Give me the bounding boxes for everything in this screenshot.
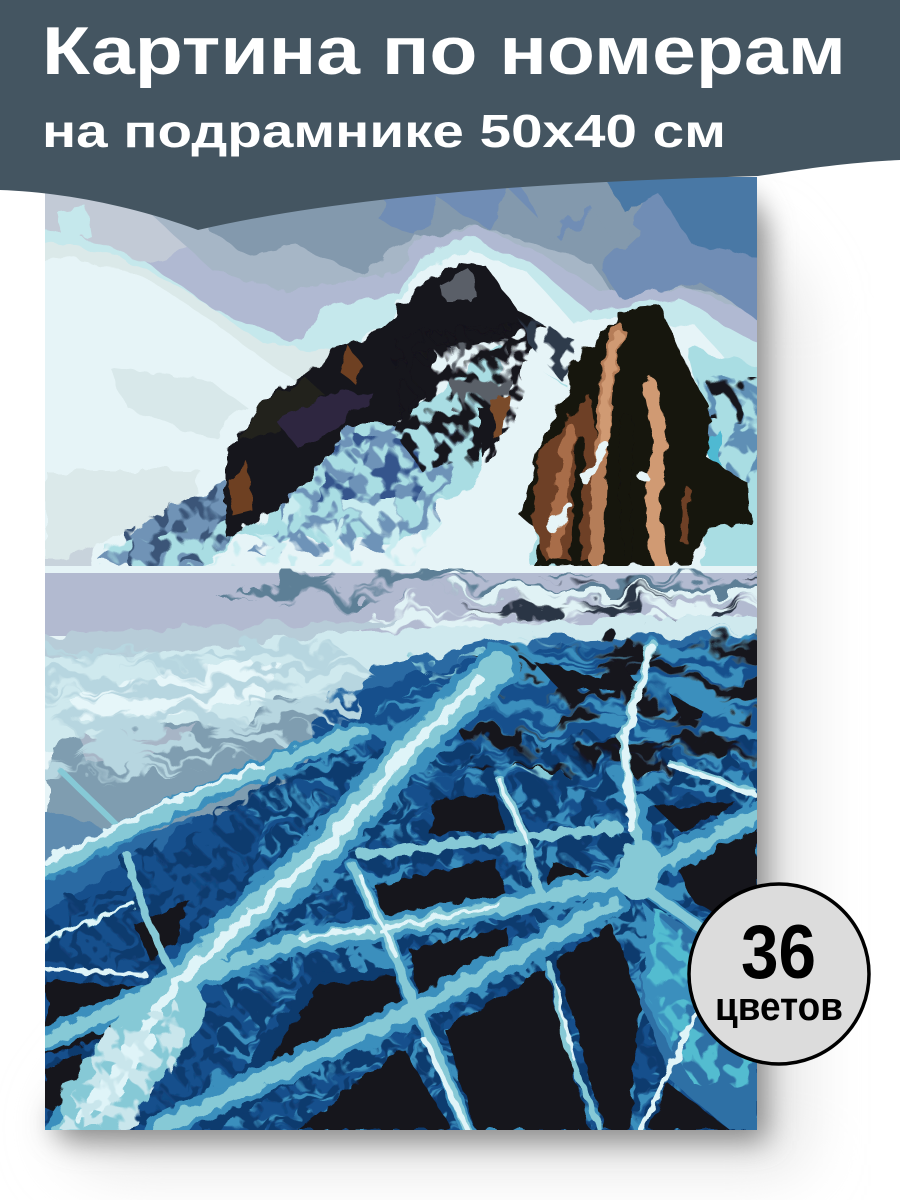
mountain snow slopes [100, 345, 572, 575]
header banner [0, 0, 900, 230]
left mountain rock [226, 263, 575, 537]
crack body teal [45, 645, 757, 1130]
right mountain rock [521, 305, 750, 567]
horizon band [45, 566, 757, 636]
subtitle: на подрамнике 50х40 см [42, 105, 726, 157]
ice cracks [45, 645, 757, 1130]
pale mottling at the crack hub [60, 1000, 185, 1130]
crack highlights white [45, 648, 756, 1129]
badge: 36 colours: 36 [741, 910, 816, 995]
sky and clouds [30, 170, 780, 580]
badge: 36 colours [689, 884, 869, 1064]
ridge right of rock [696, 375, 757, 484]
ice mottling [45, 622, 757, 1130]
painting: frozen lake and mountains [45, 177, 757, 1130]
lower-right blue corner [639, 902, 757, 1130]
crack halo blue [45, 665, 757, 1130]
ice surface [30, 615, 780, 1140]
title: Картина по номерам [42, 13, 846, 89]
dark ice patches [40, 660, 757, 1130]
canvas drop shadow [50, 190, 800, 1165]
badge: 36 colours: цветов [715, 985, 843, 1029]
